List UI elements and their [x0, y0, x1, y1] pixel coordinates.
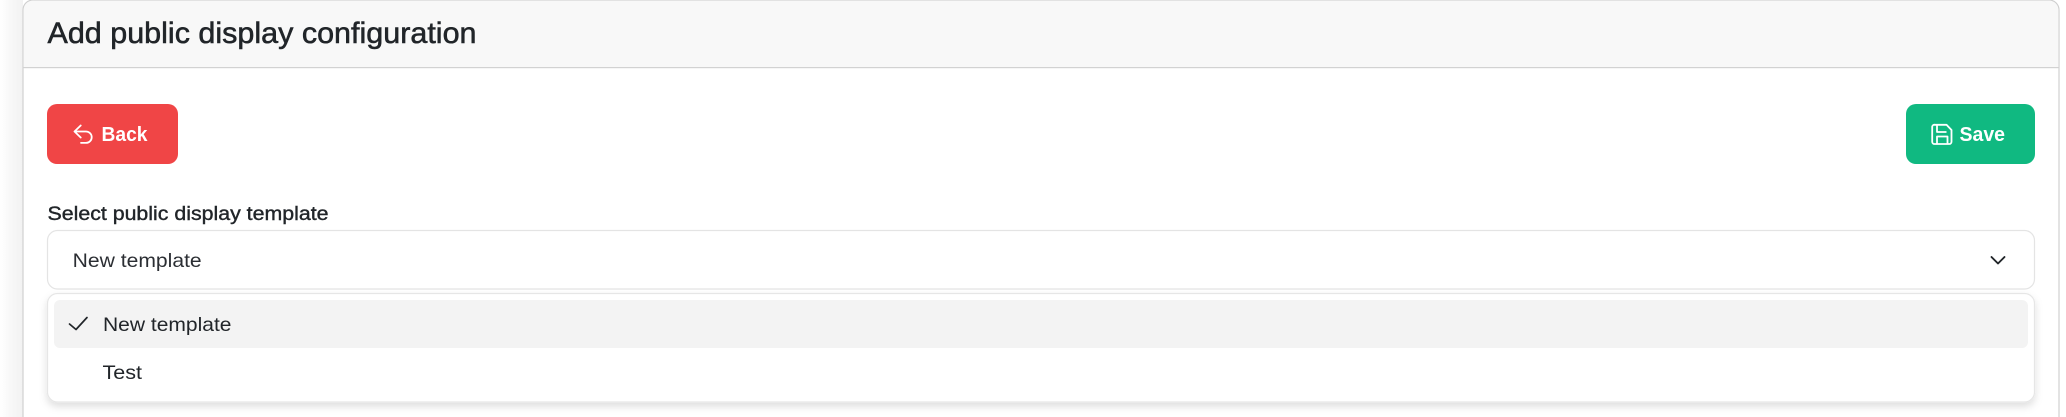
icon: floppy disk [1932, 125, 1952, 144]
icon: check mark [70, 318, 87, 330]
header divider [23, 67, 2059, 68]
save label: Save [1960, 123, 2005, 146]
option: Test: Test [102, 362, 143, 384]
field label: Select public display template [48, 203, 328, 225]
button: back [47, 104, 178, 164]
button: save [1906, 104, 2035, 164]
selected value: New template [73, 250, 202, 272]
back label: Back [102, 123, 148, 146]
icon: chevron down [1992, 257, 2004, 264]
card header bar [24, 1, 2058, 67]
option: New template highlighted [54, 300, 2028, 348]
icon: back arrow [74, 126, 92, 143]
title: Add public display configuration [48, 17, 476, 50]
dropdown menu [48, 294, 2034, 402]
select box [48, 230, 2034, 289]
left page shadow [0, 0, 23, 417]
option label: New template [103, 314, 232, 336]
